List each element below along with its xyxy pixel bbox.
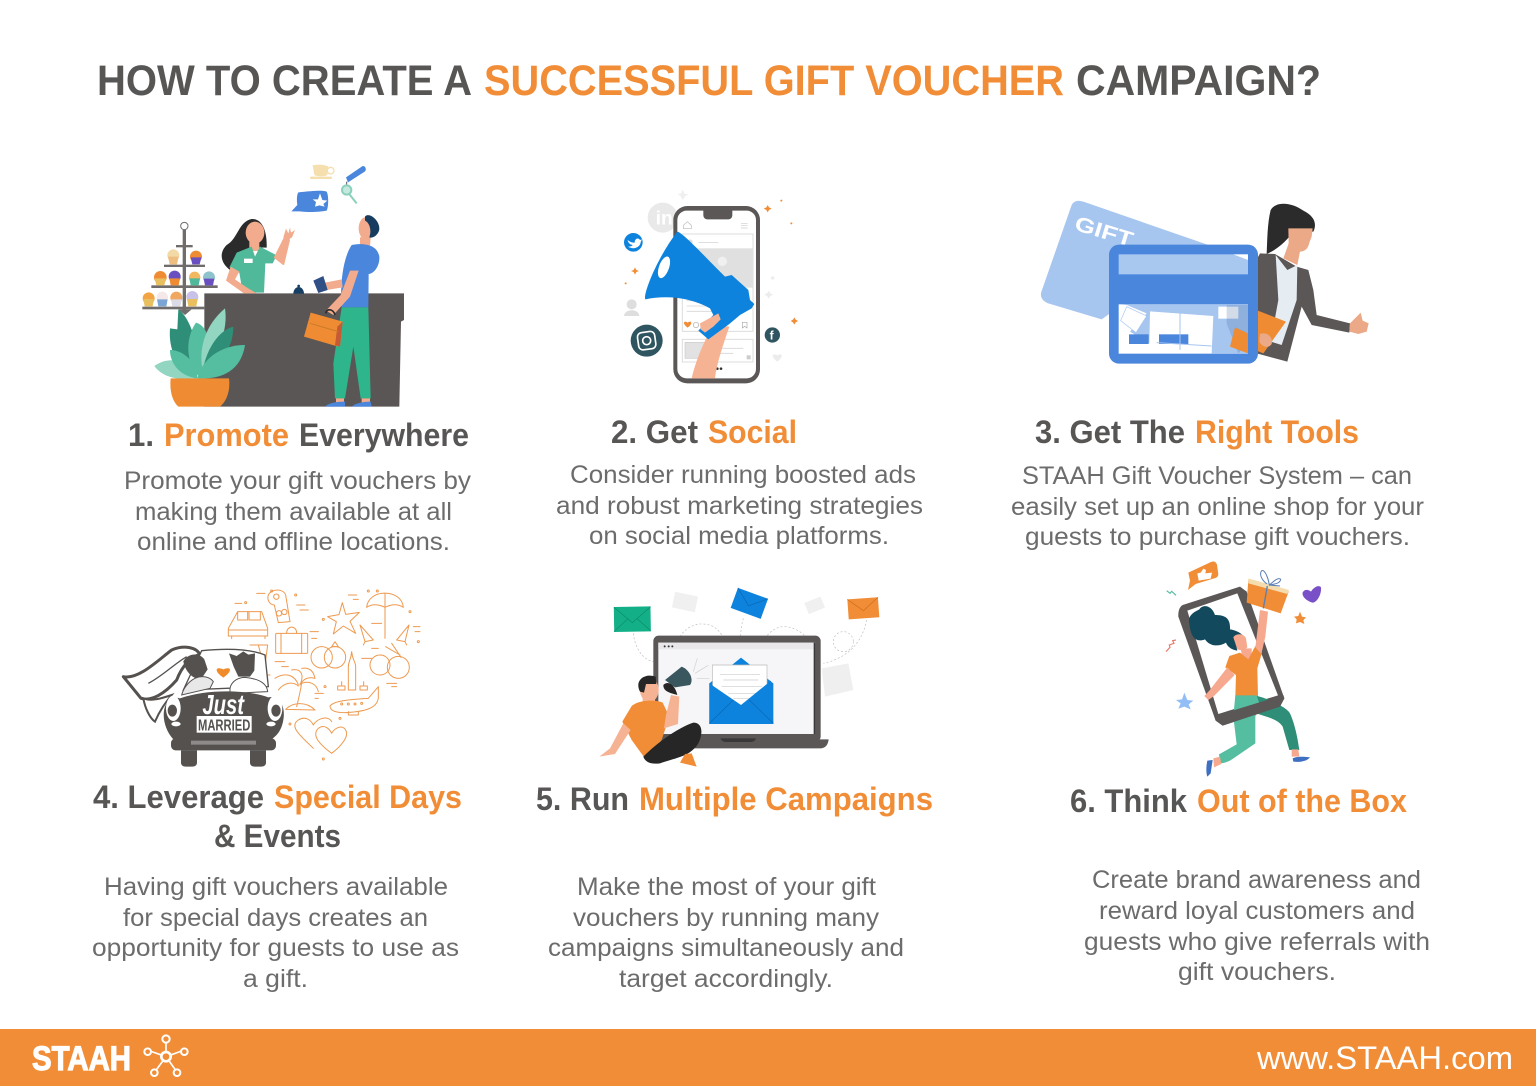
illustration: just married car and travel line icons xyxy=(123,590,420,767)
heading 5: 5. Run xyxy=(536,781,629,817)
text block 3: STAAH Gift Voucher System – can xyxy=(1022,462,1412,490)
heading 6: Out of the Box xyxy=(1197,783,1407,819)
text block 6 xyxy=(1084,866,1430,986)
text block 5: Make the most of your gift xyxy=(577,873,876,901)
text block 1: online and offline locations. xyxy=(137,528,450,556)
text block 6: reward loyal customers and xyxy=(1099,897,1415,925)
text block 3: guests to purchase gift vouchers. xyxy=(1025,523,1410,551)
text block 4: opportunity for guests to use as xyxy=(92,934,459,962)
illustration: laptop, envelopes and man with megaphone xyxy=(599,588,879,767)
title: HOW TO CREATE A xyxy=(97,57,472,105)
text block 6: guests who give referrals with xyxy=(1084,928,1430,956)
text block 4: Having gift vouchers available xyxy=(104,873,448,901)
logo icon xyxy=(144,1035,188,1076)
heading 6: 6. Think xyxy=(1070,783,1187,819)
heading 3: Right Tools xyxy=(1195,414,1359,450)
text block 1 xyxy=(124,467,472,556)
panel: 5 run multiple campaigns xyxy=(536,588,933,993)
illustration: gift card and businesswoman xyxy=(1041,201,1369,364)
text block 3 xyxy=(1011,462,1424,551)
text block 3: easily set up an online shop for your xyxy=(1011,493,1424,521)
text block 5: target accordingly. xyxy=(619,965,833,993)
heading 2 xyxy=(611,414,797,450)
heading 2: Social xyxy=(708,414,797,450)
logo wordmark: STAAH xyxy=(32,1040,131,1078)
panel: 1 promote everywhere xyxy=(124,165,472,556)
panel: 3 get the right tools xyxy=(1011,201,1424,551)
illustration: gift card and businesswoman: GIFT xyxy=(1072,212,1136,252)
footer bar xyxy=(0,1029,1536,1086)
text block 2 xyxy=(556,461,923,550)
title: CAMPAIGN? xyxy=(1076,57,1321,105)
text block 5: vouchers by running many xyxy=(573,904,880,932)
heading 6 xyxy=(1070,783,1407,819)
text block 2: on social media platforms. xyxy=(589,522,889,550)
heading 4: Special Days xyxy=(274,779,462,815)
heading 3: 3. Get The xyxy=(1035,414,1185,450)
panel: 6 think out of the box xyxy=(1070,561,1430,986)
panel: 4 leverage special days xyxy=(92,590,462,993)
illustration: just married car and travel line icons: MARRIED xyxy=(198,717,250,734)
heading 4: & Events xyxy=(214,818,341,854)
text block 5: campaigns simultaneously and xyxy=(548,934,904,962)
panel: 2 get social xyxy=(556,189,923,550)
heading 1: Everywhere xyxy=(299,417,469,453)
illustration: phone and megaphone xyxy=(624,189,798,383)
text block 4: for special days creates an xyxy=(123,904,428,932)
heading 1: 1. xyxy=(128,417,154,453)
text block 2: and robust marketing strategies xyxy=(556,492,923,520)
heading 4: 4. Leverage xyxy=(93,779,264,815)
text block 5 xyxy=(548,873,904,993)
heading 2: 2. Get xyxy=(611,414,698,450)
heading 1: Promote xyxy=(164,417,289,453)
illustration: woman jumping out of phone with gift xyxy=(1166,561,1321,777)
text block 6: gift vouchers. xyxy=(1178,958,1336,986)
text block 1: making them available at all xyxy=(135,498,452,526)
text block 6: Create brand awareness and xyxy=(1092,866,1421,894)
text block 1: Promote your gift vouchers by xyxy=(124,467,472,495)
text block 4: a gift. xyxy=(243,965,308,993)
heading 3 xyxy=(1035,414,1359,450)
website url: www.STAAH.com xyxy=(1256,1040,1513,1076)
text block 2: Consider running boosted ads xyxy=(570,461,916,489)
heading 1 xyxy=(128,417,469,453)
illustration: phone and megaphone: in xyxy=(656,209,673,230)
title: SUCCESSFUL GIFT VOUCHER xyxy=(484,57,1064,105)
heading 5: Multiple Campaigns xyxy=(639,781,933,817)
illustration: phone and megaphone: f xyxy=(770,329,775,343)
text block 4 xyxy=(92,873,459,993)
illustration: reception desk xyxy=(142,165,404,407)
heading 4 xyxy=(93,779,462,854)
title xyxy=(97,57,1321,105)
illustration: just married car and travel line icons: Just xyxy=(202,689,245,720)
